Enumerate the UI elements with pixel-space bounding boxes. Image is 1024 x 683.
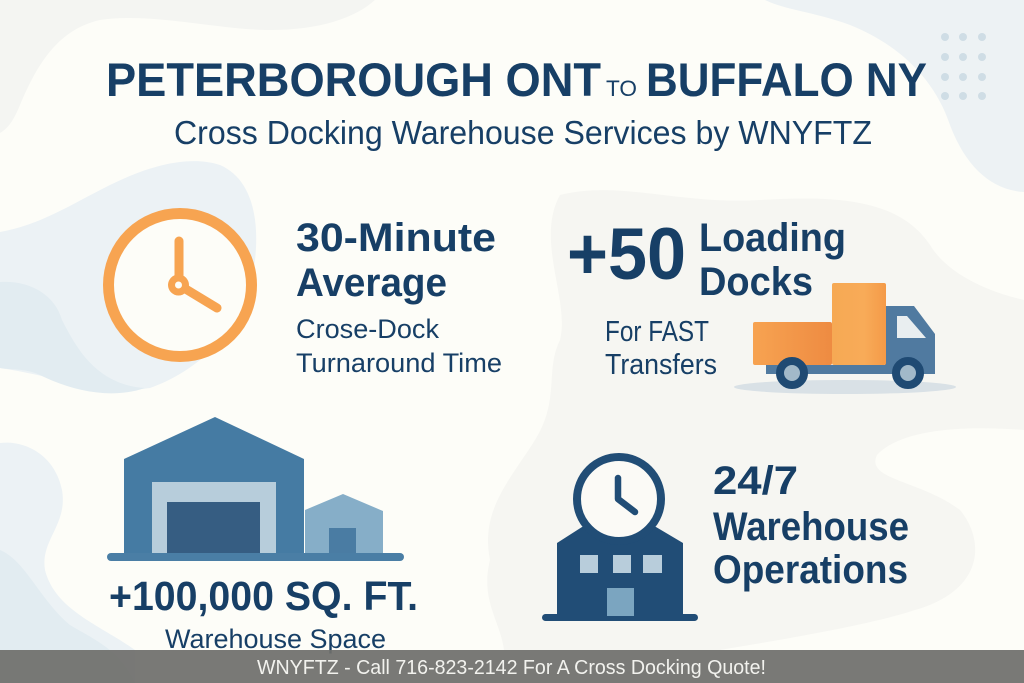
- decorative dot grid: [941, 33, 986, 100]
- text: warehouse space: Warehouse Space: [165, 624, 386, 654]
- panel: turnaround time: [108, 214, 502, 378]
- heading: 30-Minute Average: [296, 216, 496, 305]
- title: PETERBOROUGH ONT: [106, 53, 601, 106]
- text: turnaround description: Crose-Dock: [296, 314, 439, 344]
- title: [106, 53, 927, 106]
- icon: warehouse: [107, 417, 404, 561]
- heading: 24/7 Warehouse Operations: Warehouse: [713, 505, 909, 549]
- heading: 30-Minute Average: Average: [296, 261, 447, 305]
- heading: 30-Minute Average: 30-Minute: [296, 216, 496, 260]
- subtitle: Cross Docking Warehouse Services by WNYFTZ: [174, 114, 872, 151]
- icon: orange clock: [108, 214, 252, 356]
- text: for fast transfers: For FAST: [605, 316, 709, 348]
- icon: building with clock: [542, 457, 698, 621]
- title: TO: [606, 76, 637, 101]
- title: BUFFALO NY: [646, 53, 927, 106]
- text: turnaround description: Turnaround Time: [296, 348, 502, 378]
- heading: 24/7 Warehouse Operations: 24/7: [713, 459, 798, 503]
- footer bar: [0, 650, 1024, 683]
- text: turnaround description: [296, 314, 502, 378]
- panel: loading docks: [567, 214, 956, 394]
- heading: +100,000 sq. ft.: +100,000 SQ. FT.: [109, 573, 418, 619]
- footer bar: WNYFTZ - Call 716-823-2142 For A Cross Docking Quote!: [257, 657, 766, 679]
- heading: 24/7 Warehouse Operations: Operations: [713, 548, 908, 592]
- panel: warehouse space: [107, 417, 418, 654]
- text: for fast transfers: [605, 316, 717, 381]
- heading: Loading Docks: Docks: [699, 260, 813, 304]
- heading: Loading Docks: Loading: [699, 216, 846, 260]
- heading: Loading Docks: [699, 216, 846, 304]
- heading: +50: +50: [567, 214, 686, 295]
- panel: 24/7 operations: [542, 457, 909, 621]
- text: for fast transfers: Transfers: [605, 349, 717, 381]
- icon: delivery truck: [734, 283, 956, 394]
- heading: 24/7 Warehouse Operations: [713, 459, 909, 592]
